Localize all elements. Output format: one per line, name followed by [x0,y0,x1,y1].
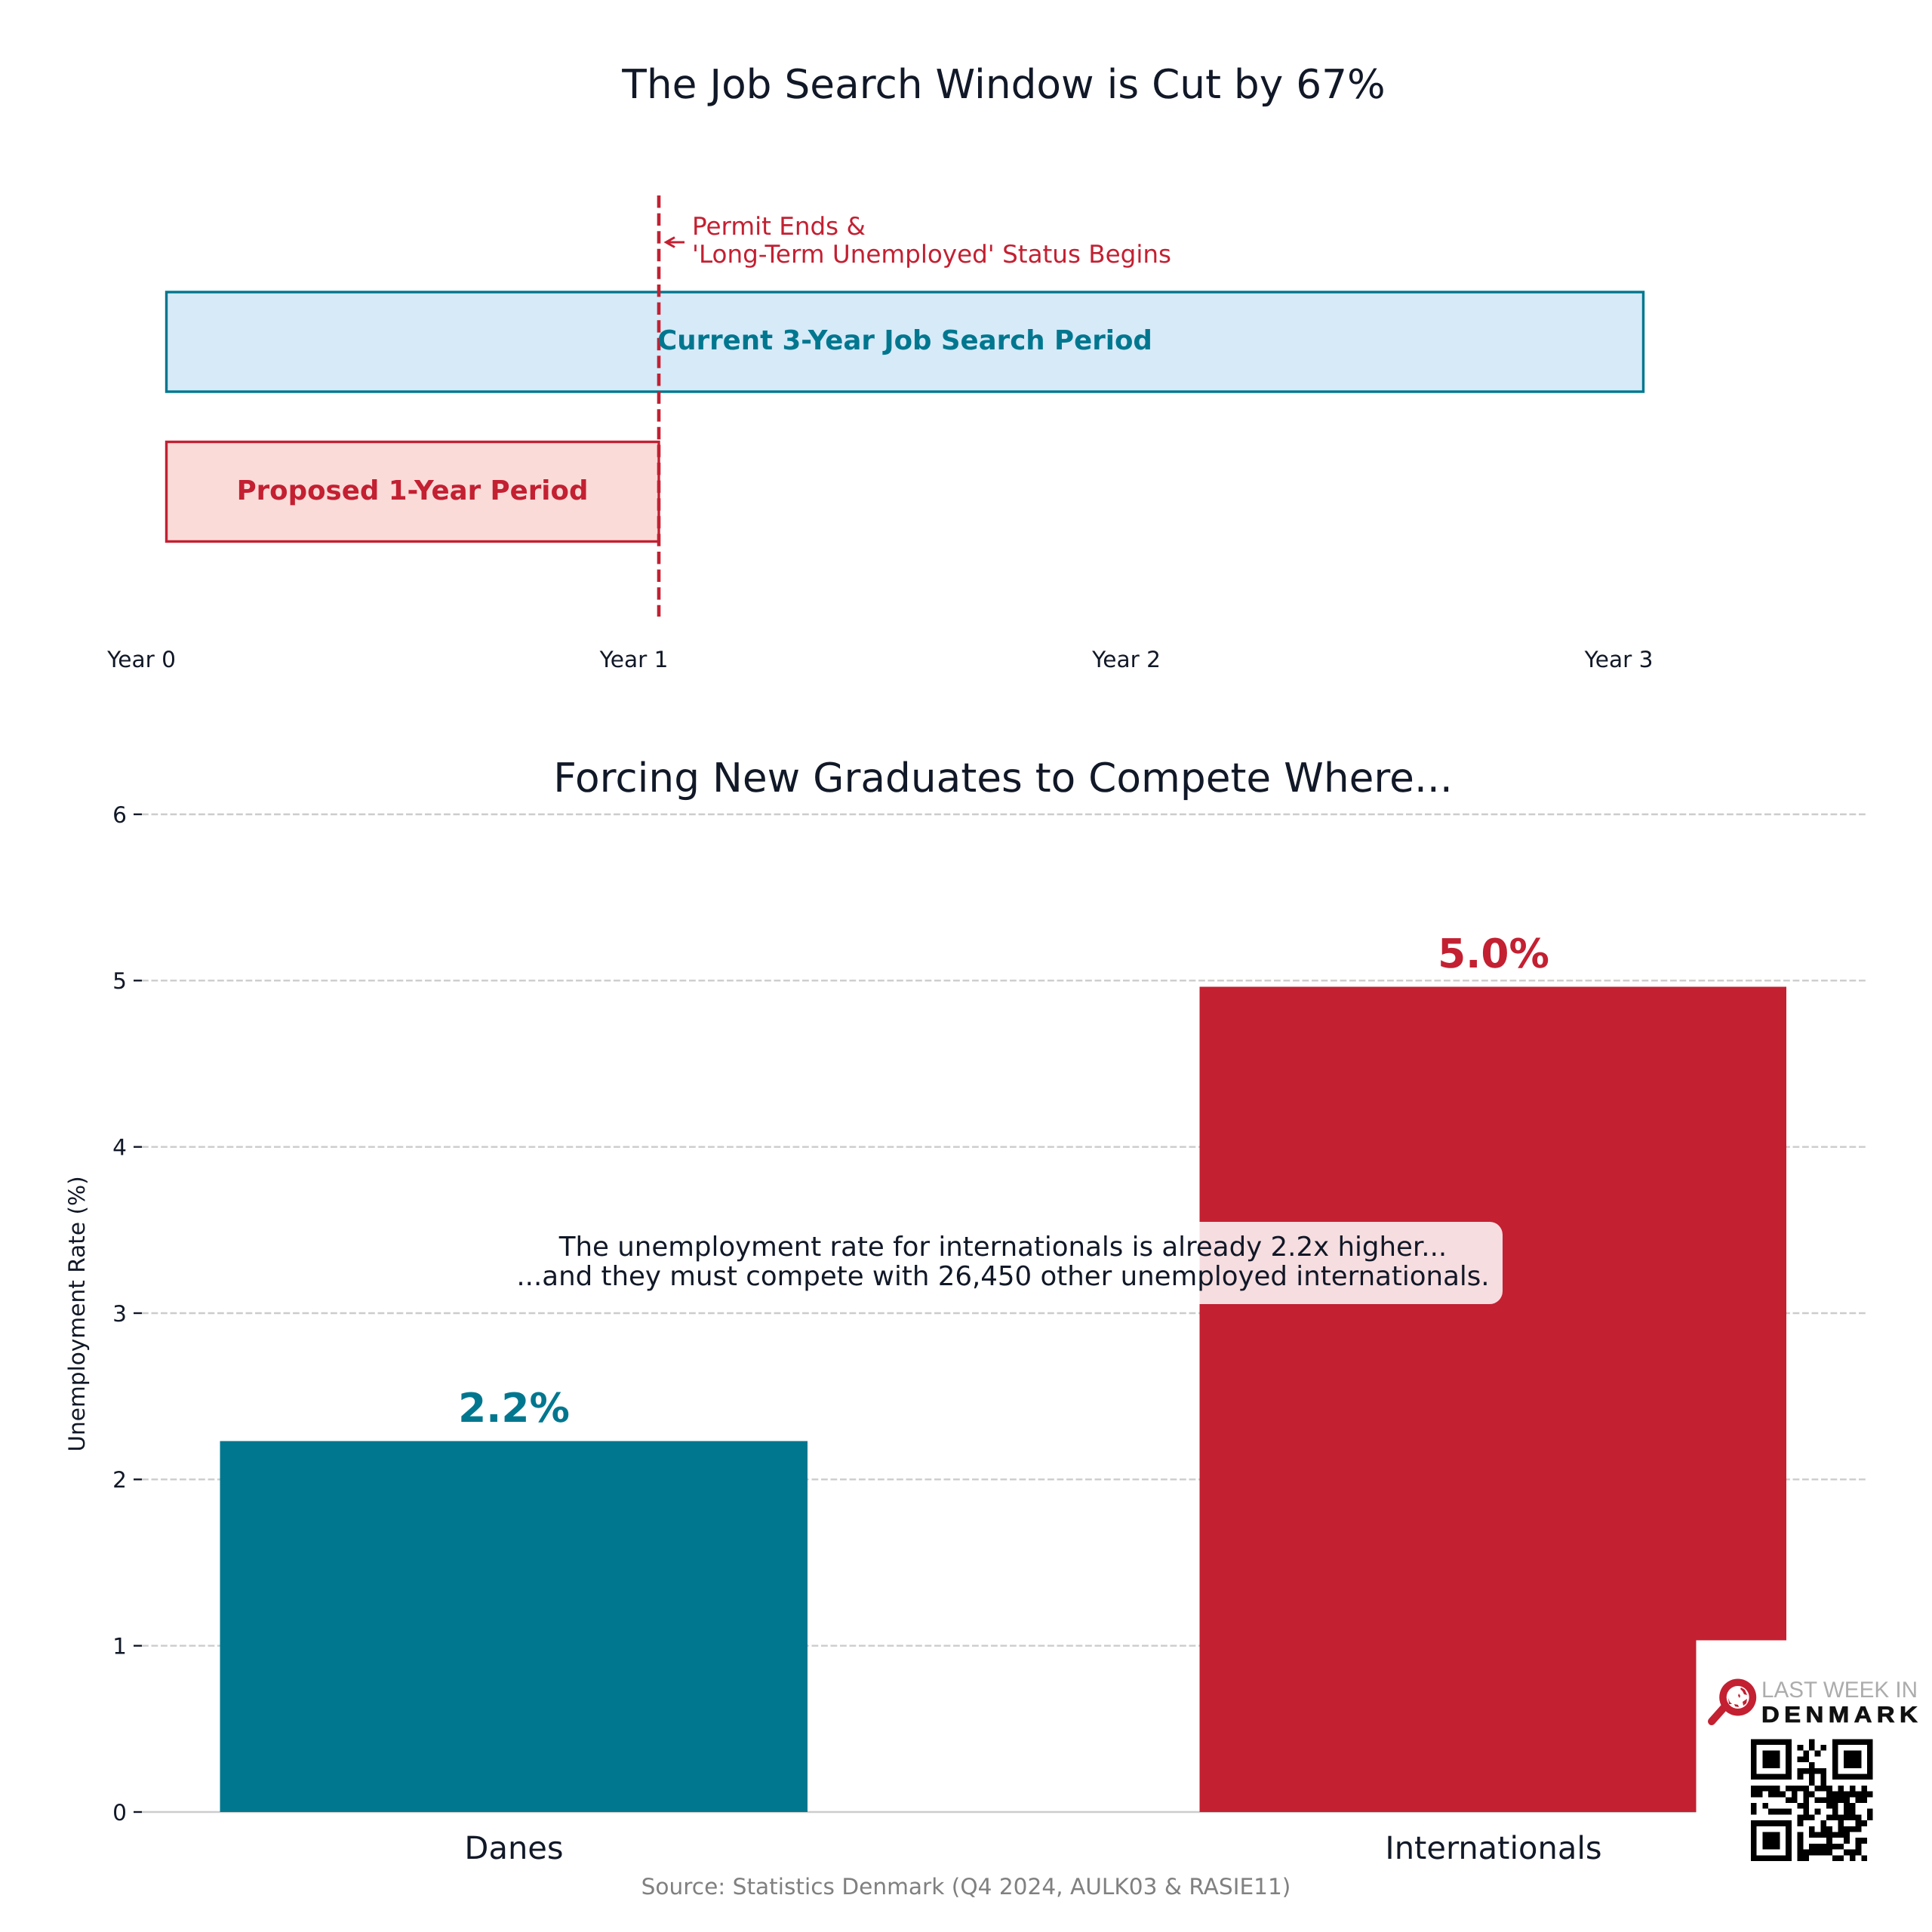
wordmark: last week in: LAST WEEK IN [1761,1678,1918,1703]
y axis labels: 0 [112,1800,127,1826]
annotation: permit ends: Permit Ends & [692,212,866,241]
title: job search window: The Job Search Window is Cut by 67% [621,61,1386,108]
y axis title: Unemployment Rate (%) [64,1176,90,1452]
y axis labels [112,802,127,1826]
y axis labels: 2 [112,1467,127,1493]
y axis labels: 4 [112,1135,127,1161]
QR code [1751,1739,1873,1861]
axis labels: years: Year 1 [599,647,669,672]
title: forcing new graduates: Forcing New Graduates to Compete Where... [553,755,1453,801]
bar: Danes [220,1441,808,1812]
category label: Internationals: Internationals [1385,1829,1602,1866]
panel: timeline chart [106,195,1653,672]
source note: Source: Statistics Denmark (Q4 2024, AULK03 & RASIE11) [641,1874,1291,1900]
bar: proposed 1-year period [166,442,659,542]
axis labels: years [106,647,1653,672]
value: Danes: 2.2% [458,1385,570,1432]
y axis labels: 3 [112,1301,127,1327]
y axis labels: 1 [112,1633,127,1659]
panel: unemployment bar chart [64,802,1866,1866]
x axis line [142,1811,1866,1813]
label: proposed period: Proposed 1-Year Period [237,475,588,506]
callout: unemployment comparison: The unemployment rate for internationals is already 2.2x higher... [558,1232,1447,1263]
icon: magnifying glass globe [1712,1678,1756,1721]
y axis labels: 6 [112,802,127,828]
grid lines [142,814,1866,1646]
label: current period: Current 3-Year Job Search Period [657,325,1152,356]
y axis labels: 5 [112,968,127,994]
wordmark: denmark: DENMARK [1761,1703,1918,1727]
bar: Internationals [1200,987,1786,1812]
logo panel [1697,1641,1932,1932]
callout: unemployment comparison: ...and they must compete with 26,450 other unemployed internationals. [516,1261,1490,1292]
y axis ticks [134,814,142,1812]
annotation: permit ends: 'Long-Term Unemployed' Status Begins [692,240,1171,269]
axis labels: years: Year 3 [1584,647,1653,672]
callout: unemployment comparison [503,1222,1503,1304]
value: Internationals: 5.0% [1438,931,1549,977]
bar: current 3-year period [166,292,1644,392]
marker: year 1 dashed line [657,195,660,617]
arrow: to permit end line [666,237,685,248]
axis labels: years: Year 0 [106,647,176,672]
axis labels: years: Year 2 [1091,647,1161,672]
category label: Danes: Danes [464,1829,564,1866]
